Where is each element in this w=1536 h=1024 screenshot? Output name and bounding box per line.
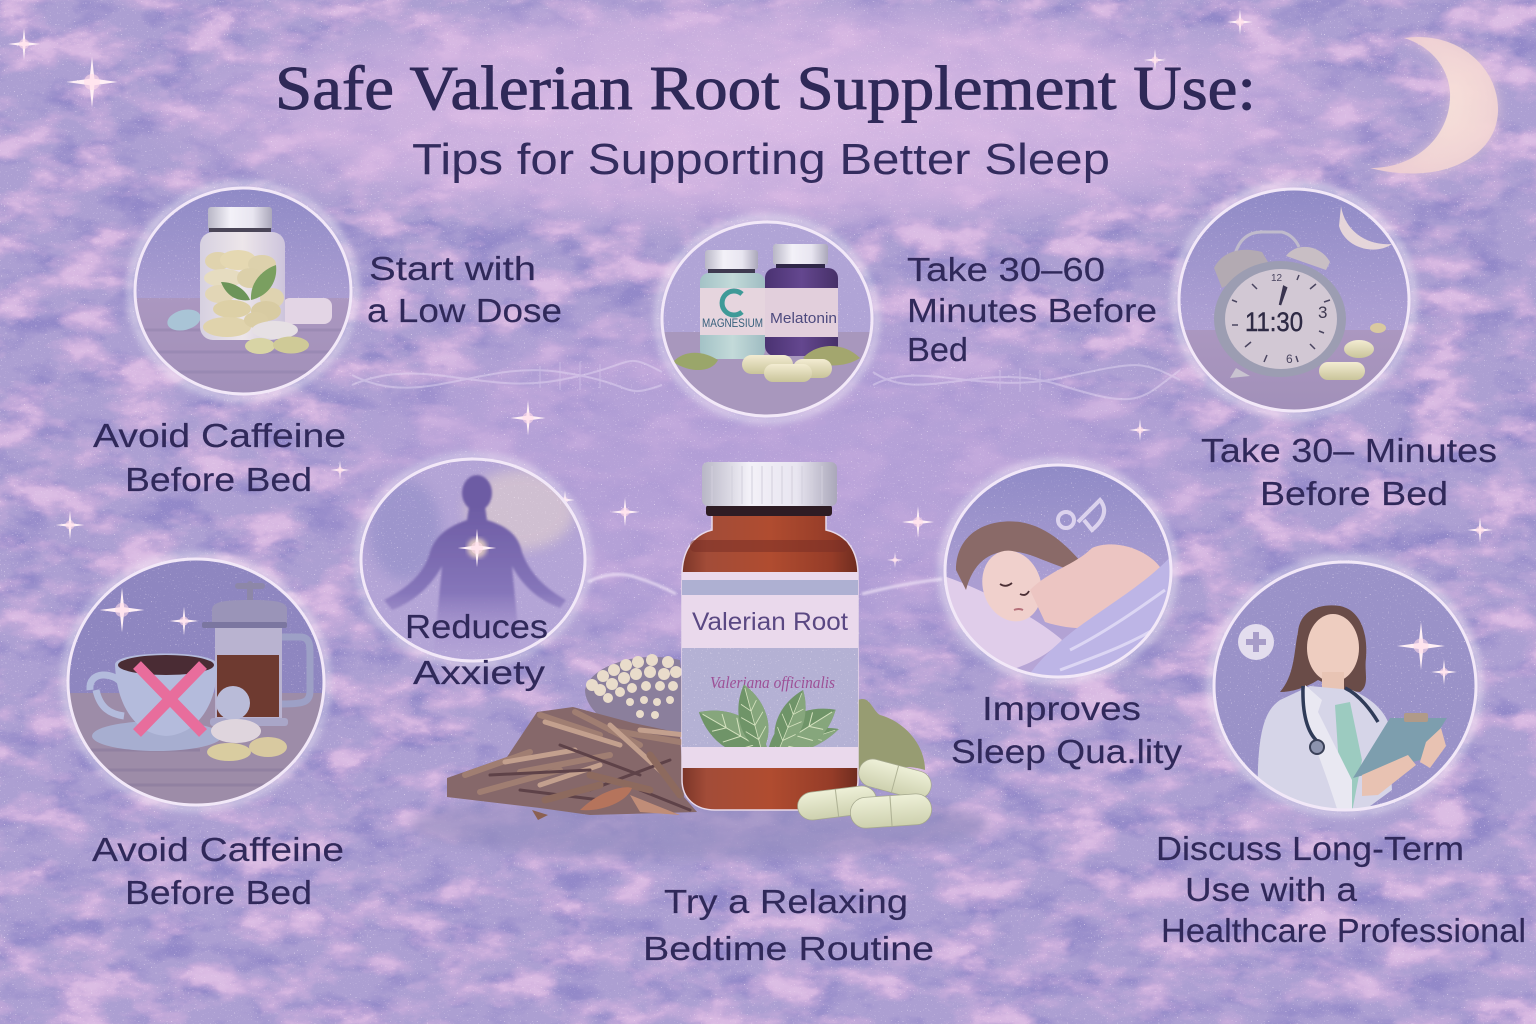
icon: capsules: [1319, 323, 1386, 380]
icon: doctor: [1258, 605, 1392, 812]
icon: dried flowers: [585, 654, 690, 735]
label: take 30 minutes before bed: Take 30– Minutes: [1201, 432, 1497, 469]
label: try a relaxing bedtime routine: Bedtime Routine: [643, 930, 934, 967]
icon: alarm clock: 3: [1318, 303, 1327, 322]
label: avoid caffeine before bed, upper: Before Bed: [125, 461, 312, 498]
icon: melatonin bottle: Melatonin: [770, 310, 837, 327]
crescent moon: [1370, 37, 1498, 174]
panel: reduces anxiety: [358, 456, 588, 664]
label: take 30 minutes before bed: Before Bed: [1260, 475, 1448, 512]
icon: magnesium bottle: [700, 250, 765, 359]
icon: moon in panel: [1339, 206, 1392, 250]
icon: ball and pills: [207, 686, 287, 761]
label: avoid caffeine before bed, upper: Avoid Caffeine: [93, 417, 346, 454]
bottle label: Valeriana officinalis: [710, 673, 835, 692]
label: start with a low dose: a Low Dose: [367, 292, 562, 329]
panel: sleeping woman: [942, 462, 1180, 690]
icon: leaves behind bottle: [858, 699, 925, 775]
label: take 30-60 minutes before bed: Bed: [907, 331, 968, 368]
icon: pink cross: [137, 665, 203, 733]
icon: alarm clock: [1214, 232, 1346, 378]
icon: medical cross: [1238, 624, 1274, 660]
icon: capsules and leaves: [673, 346, 860, 382]
label: avoid caffeine before bed, lower: Avoid Caffeine: [92, 831, 344, 868]
label: start with a low dose: [367, 250, 562, 329]
label: discuss long-term use with a healthcare professional: Use with a: [1185, 871, 1358, 908]
label: take 30-60 minutes before bed: Take 30–60: [907, 251, 1105, 288]
bottle neck ring: [706, 505, 832, 516]
decorative sparkle stars: [8, 9, 1493, 568]
icon: loose pills: [245, 321, 309, 354]
panel: healthcare professional: [1211, 559, 1479, 814]
panel: supplement bottles: [658, 218, 876, 422]
icon: blue and white tablets: [167, 298, 332, 330]
icon: dream symbols: [1058, 500, 1104, 530]
icon: french press: [202, 584, 310, 726]
bottle cap: [702, 462, 837, 506]
icon: capsules beside bottle: [796, 756, 934, 829]
icon: heart star: [458, 529, 496, 567]
illustration: valerian root bottle: [682, 462, 858, 810]
panel: low dose jar: [130, 180, 360, 403]
icon: pill jar: [200, 207, 285, 340]
icon: meditating figure: [384, 475, 566, 650]
label: take 30-60 minutes before bed: [907, 251, 1157, 368]
label: improves sleep quality: Improves: [982, 690, 1141, 727]
label: take 30-60 minutes before bed: Minutes Before: [907, 292, 1157, 329]
icon: valerian leaves: [690, 681, 845, 767]
label: try a relaxing bedtime routine: Try a Relaxing: [664, 883, 908, 920]
label: avoid caffeine before bed, lower: [92, 831, 344, 911]
icon: clipboard: [1353, 713, 1447, 796]
icon: magnesium bottle: MAGNESIUM: [702, 316, 763, 330]
icon: alarm clock: 12: [1271, 273, 1283, 284]
label: avoid caffeine before bed, upper: [93, 417, 346, 498]
icon: coffee saucer and cup: [90, 654, 222, 751]
label: discuss long-term use with a healthcare professional: Discuss Long-Term: [1156, 830, 1464, 867]
icon: blanket: [1031, 558, 1170, 676]
label: take 30 minutes before bed: [1201, 432, 1497, 512]
connector arcs to bottle: [588, 574, 942, 594]
label: reduces anxiety: Reduces: [405, 608, 548, 645]
icon: melatonin bottle: [765, 244, 838, 356]
label: improves sleep quality: Sleep Qua.lity: [951, 733, 1183, 770]
icon: sleeping woman: [956, 521, 1162, 629]
label: reduces anxiety: [405, 608, 548, 691]
icon: alarm clock: 11:30: [1245, 307, 1303, 337]
icon: root chips: [532, 787, 680, 820]
label: start with a low dose: Start with: [369, 250, 536, 287]
label: try a relaxing bedtime routine: [643, 883, 934, 967]
label: avoid caffeine before bed, lower: Before Bed: [125, 874, 312, 911]
label: reduces anxiety: Axxiety: [413, 654, 546, 691]
faint DNA helix strand: [352, 361, 1180, 399]
bottle label: [682, 572, 858, 768]
panel: alarm clock: [1175, 185, 1413, 420]
title: Safe Valerian Root Supplement Use:: [275, 55, 1256, 123]
label: discuss long-term use with a healthcare professional: [1156, 830, 1526, 949]
panel: avoid caffeine: [65, 556, 328, 808]
icon: dried root heap: [447, 707, 697, 815]
subtitle: Tips for Supporting Better Sleep: [412, 135, 1110, 184]
illustration: ground and valerian root pile: [410, 654, 990, 859]
bottle label: Valerian Root: [692, 608, 848, 636]
icon: alarm clock: 6: [1286, 352, 1293, 366]
label: improves sleep quality: [951, 690, 1183, 770]
icon: pillow: [946, 577, 1062, 668]
label: discuss long-term use with a healthcare professional: Healthcare Professional: [1161, 912, 1526, 949]
